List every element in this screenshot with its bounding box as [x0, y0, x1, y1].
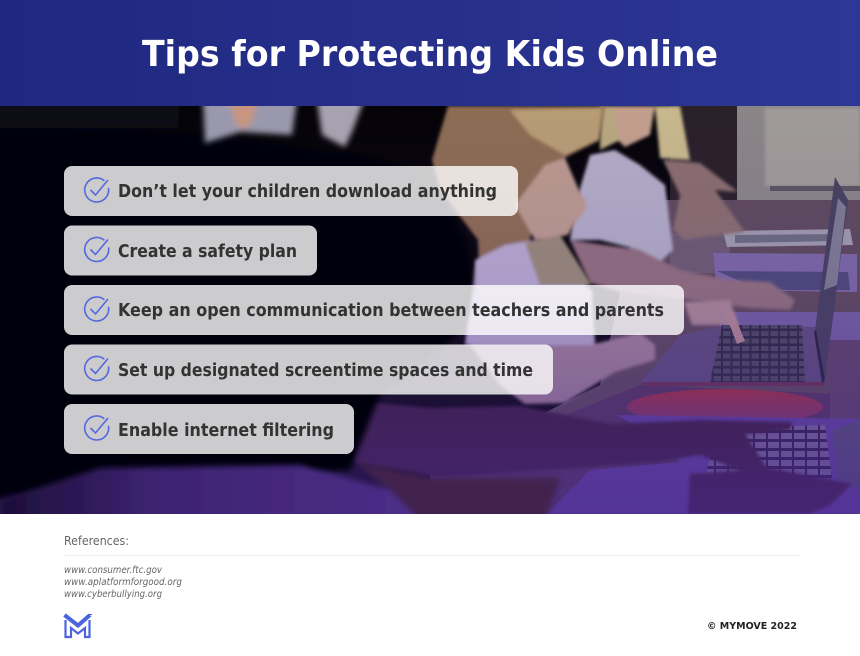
tip 2: Create a safety plan: [118, 241, 297, 262]
first child: [432, 106, 745, 404]
blurred background figures: [0, 100, 364, 147]
laptop: centre: [640, 177, 848, 386]
child arms: [352, 402, 852, 514]
tip 4: Set up designated screentime spaces and time: [118, 360, 533, 381]
header banner: [0, 0, 860, 106]
tip 4: [64, 344, 553, 394]
tip 3: Keep an open communication between teachers and parents: [118, 300, 664, 321]
tip 2: [64, 226, 317, 276]
second child: [570, 106, 795, 310]
tip 3: [64, 285, 684, 335]
icon: MyMove logo: [64, 614, 92, 637]
laptop: foreground: [547, 415, 860, 514]
tip 1: [64, 166, 518, 216]
references list: www.consumer.ftc.gov: [64, 565, 163, 576]
child shirt: lower left: [0, 462, 560, 520]
tip 1: Don’t let your children download anything: [118, 181, 497, 202]
references list: www.aplatformforgood.org: [64, 577, 182, 588]
references list: [64, 565, 182, 600]
tip 5: [64, 404, 354, 454]
references heading: References:: [64, 534, 129, 548]
red circle: [627, 389, 823, 418]
photo: children using laptops at a table: [0, 100, 860, 520]
tip 5: Enable internet filtering: [118, 420, 334, 441]
dark curly hair: [0, 173, 478, 502]
title: Tips for Protecting Kids Online: [142, 34, 718, 75]
references list: www.cyberbullying.org: [64, 589, 162, 600]
copyright: © MYMOVE 2022: [707, 621, 797, 632]
back wall and table: [670, 106, 737, 200]
list: tips: [64, 166, 684, 454]
